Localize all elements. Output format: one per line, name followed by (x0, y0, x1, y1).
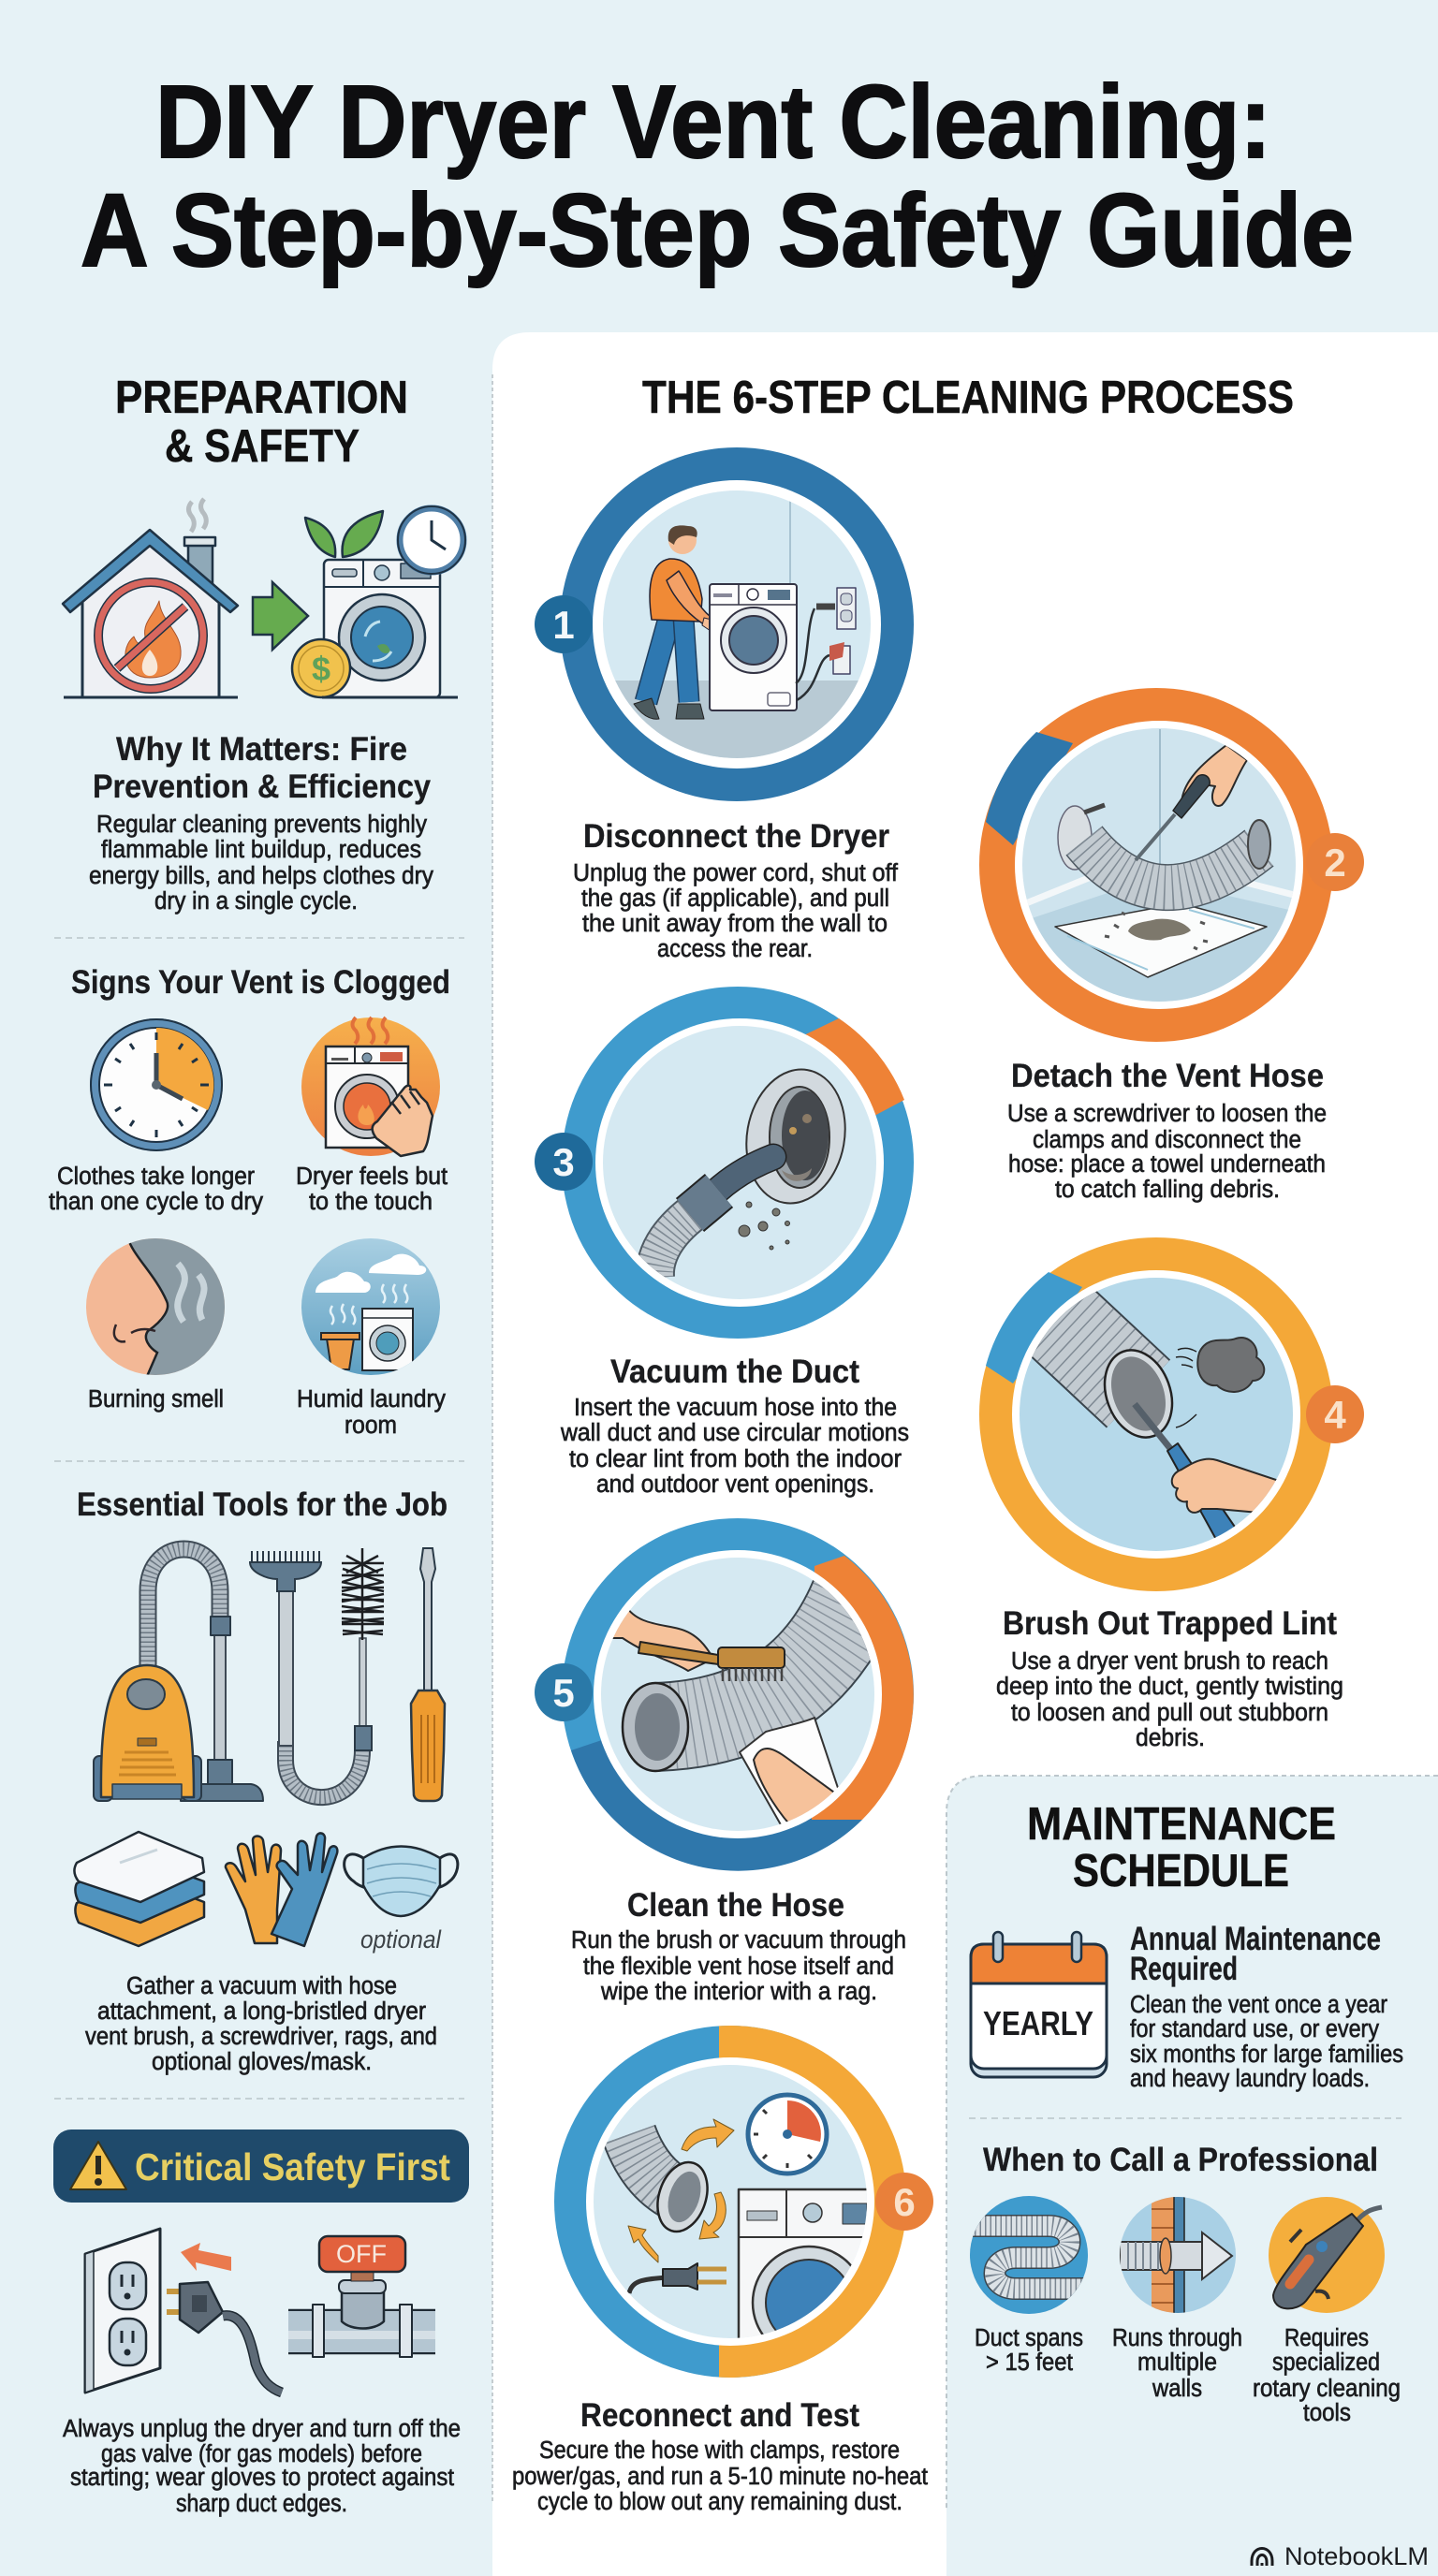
text: brush out trapped lint: debris. (1136, 1725, 1205, 1751)
title (81, 65, 1354, 288)
badge: step 3 (535, 1133, 593, 1191)
text: gather tools: vent brush, a screwdriver, rags, and (85, 2024, 437, 2050)
text: brush out trapped lint: deep into the duct, gently twisting (996, 1674, 1343, 1700)
panel: maintenance schedule (946, 1776, 1438, 2576)
icon: yearly calendar (971, 1932, 1107, 2077)
text: brush out trapped lint: Use a dryer vent brush to reach (1011, 1648, 1328, 1675)
badge: step 2 (1306, 833, 1364, 891)
text: brush out trapped lint: Brush Out Trapped Lint (1003, 1605, 1337, 1642)
text: disconnect the dryer: the unit away from the wall to (582, 911, 888, 937)
text block: why it matters: flammable lint buildup, reduces (101, 837, 421, 863)
icon: floor brush with flexible hose (250, 1551, 362, 1797)
section heading: preparation and safety: & SAFETY (165, 421, 360, 472)
text: brush out trapped lint: to loosen and pull out stubborn (1011, 1700, 1328, 1726)
text: clothes take longer (49, 1164, 263, 1215)
text: detach the vent hose: Detach the Vent Hose (1011, 1058, 1324, 1094)
step 2 illustration (979, 688, 1364, 1042)
text: disconnect the dryer: Unplug the power cord, shut off (573, 860, 899, 886)
text: gather tools: attachment, a long-bristled dryer (97, 1998, 426, 2025)
text: clean the hose: Clean the Hose (627, 1887, 844, 1924)
icon: gas valve off: OFF (336, 2240, 387, 2268)
text: clean the hose (571, 1887, 906, 2005)
icon: rotary cleaning tool (1269, 2197, 1385, 2313)
icon: wall outlet (85, 2229, 160, 2393)
icon: vacuum cleaner (94, 1549, 263, 1801)
heading: the six step cleaning process: THE 6-STEP CLEANING PROCESS (642, 373, 1294, 423)
text: burning smell: Burning smell (88, 1386, 224, 1412)
icon: efficient dryer with leaves, clock and coin (292, 506, 465, 697)
label: specialized tools: specialized (1272, 2349, 1380, 2376)
banner: critical safety first (53, 2130, 469, 2203)
text: reconnect and test: cycle to blow out any remaining dust. (537, 2489, 902, 2515)
text block: why it matters: Regular cleaning prevents highly (96, 812, 427, 838)
heading: signs your vent is clogged: Signs Your Vent is Clogged (71, 964, 450, 1001)
text: vacuum the duct: wall duct and use circular motions (560, 1420, 909, 1446)
icon: duct through walls (1120, 2197, 1236, 2313)
badge: step 2: 2 (1324, 841, 1346, 885)
icon: face mask (345, 1846, 458, 1916)
text: vacuum the duct: to clear lint from both the indoor (569, 1446, 902, 1472)
icon: warning triangle (70, 2142, 126, 2189)
icon: plug and cord (167, 2282, 282, 2393)
logo: notebooklm: NotebookLM (1284, 2542, 1429, 2570)
text: annual maintenance: Required (1130, 1951, 1238, 1987)
text: always unplug (63, 2416, 461, 2517)
label: duct spans: > 15 feet (986, 2349, 1073, 2376)
text: annual maintenance: and heavy laundry loads. (1130, 2066, 1370, 2092)
text: dryer feels hot: Dryer feels but (296, 1164, 448, 1190)
heading: when to call a professional: When to Call a Professional (983, 2142, 1378, 2178)
label: runs through walls (1112, 2325, 1242, 2402)
badge: step 5 (535, 1663, 593, 1721)
text: always unplug: sharp duct edges. (176, 2491, 347, 2517)
text: clean the hose: the flexible vent hose itself and (583, 1954, 894, 1980)
text: vacuum the duct: Vacuum the Duct (610, 1354, 859, 1390)
heading: essential tools: Essential Tools for the Job (77, 1486, 448, 1523)
title: DIY Dryer Vent Cleaning: (155, 65, 1271, 180)
label: specialized tools: rotary cleaning (1253, 2376, 1401, 2402)
heading: maintenance schedule: SCHEDULE (1073, 1846, 1289, 1896)
badge: step 6: 6 (893, 2180, 916, 2224)
title: A Step-by-Step Safety Guide (81, 173, 1354, 288)
text: gather tools: Gather a vacuum with hose (126, 1973, 397, 1999)
text: always unplug: Always unplug the dryer and turn off the (63, 2416, 461, 2442)
icon: house with no fire (63, 499, 238, 697)
text: annual maintenance (1130, 1921, 1403, 2092)
text: dryer feels hot (296, 1164, 448, 1215)
step 4 illustration (979, 1237, 1364, 1591)
step 6 illustration (554, 2026, 933, 2378)
badge: step 4: 4 (1324, 1393, 1346, 1437)
icon: nose and smoke (86, 1238, 225, 1375)
text: disconnect the dryer: access the rear. (657, 936, 813, 962)
text block: why it matters (89, 731, 433, 915)
label: specialized tools (1253, 2325, 1401, 2426)
badge: step 3: 3 (552, 1140, 575, 1184)
icon: screwdriver (411, 1548, 445, 1801)
panel: preparation and safety (49, 373, 469, 2517)
text block: why it matters: energy bills, and helps clothes dry (89, 863, 433, 889)
text: vacuum the duct: and outdoor vent openings. (596, 1471, 874, 1498)
text: detach the vent hose (1007, 1058, 1327, 1203)
text block: why it matters: Why It Matters: Fire (116, 731, 407, 768)
text: brush out trapped lint (996, 1605, 1343, 1751)
arrow: unplug direction (181, 2243, 231, 2271)
text: clothes take longer: Clothes take longer (57, 1164, 255, 1190)
heading: maintenance schedule: MAINTENANCE (1027, 1799, 1336, 1850)
icon: towels (74, 1832, 204, 1946)
text: detach the vent hose: hose: place a towel underneath (1008, 1151, 1326, 1178)
badge: step 1 (535, 595, 593, 653)
text: clean the hose: Run the brush or vacuum through (571, 1927, 906, 1954)
text: dryer feels hot: to the touch (309, 1189, 433, 1215)
badge: step 1: 1 (552, 603, 575, 647)
banner: critical safety first: Critical Safety First (135, 2145, 450, 2188)
text: vacuum the duct (560, 1354, 909, 1498)
text block: why it matters: Prevention & Efficiency (93, 768, 431, 805)
icon: gas valve off (288, 2236, 435, 2357)
text: disconnect the dryer: Disconnect the Dryer (583, 818, 889, 855)
label: duct spans: Duct spans (975, 2325, 1083, 2351)
text: reconnect and test: Reconnect and Test (580, 2397, 859, 2434)
text: annual maintenance: Clean the vent once a year (1130, 1992, 1387, 2018)
text: humid laundry room: Humid laundry (297, 1386, 446, 1412)
badge: step 5: 5 (552, 1671, 575, 1715)
label: specialized tools: Requires (1284, 2325, 1369, 2351)
text: reconnect and test: Secure the hose with clamps, restore (539, 2437, 900, 2464)
text: always unplug: starting; wear gloves to protect against (70, 2465, 454, 2491)
text: detach the vent hose: clamps and disconnect the (1033, 1127, 1301, 1153)
text: disconnect the dryer: the gas (if applicable), and pull (581, 886, 889, 912)
text: detach the vent hose: Use a screwdriver to loosen the (1007, 1101, 1327, 1127)
text: gather tools (85, 1973, 437, 2075)
icon: efficient dryer with leaves, clock and coin: $ (312, 650, 330, 688)
text: reconnect and test (512, 2397, 928, 2515)
badge: step 4 (1306, 1385, 1364, 1443)
text: humid laundry room: room (345, 1412, 397, 1439)
text: humid laundry room (297, 1386, 446, 1439)
section heading: preparation and safety: PREPARATION (115, 373, 408, 423)
step 5 illustration (535, 1518, 914, 1871)
heading: maintenance schedule (1027, 1799, 1336, 1896)
label: specialized tools: tools (1303, 2400, 1351, 2426)
text: clean the hose: wipe the interior with a rag. (600, 1979, 877, 2005)
text: annual maintenance: six months for large families (1130, 2042, 1403, 2068)
badge: step 6 (875, 2173, 933, 2231)
icon: yearly calendar: YEARLY (983, 2004, 1093, 2042)
text: annual maintenance: for standard use, or every (1130, 2016, 1379, 2042)
label: runs through walls: Runs through (1112, 2325, 1242, 2351)
step 1 illustration (535, 447, 914, 801)
icon: long duct (964, 2196, 1095, 2314)
icon: hot dryer (301, 1017, 440, 1156)
text: clothes take longer: than one cycle to dry (49, 1189, 263, 1215)
text: always unplug: gas valve (for gas models) before (101, 2441, 422, 2467)
icon: gloves (226, 1833, 337, 1946)
text: gather tools: optional gloves/mask. (152, 2049, 372, 2075)
label: runs through walls: multiple (1137, 2349, 1217, 2376)
label: runs through walls: walls (1152, 2376, 1202, 2402)
panel: six step cleaning process (492, 332, 1438, 2576)
text: detach the vent hose: to catch falling debris. (1055, 1177, 1280, 1203)
label: duct spans (975, 2325, 1083, 2376)
step 3 illustration (535, 987, 914, 1339)
icon: clock (91, 1019, 222, 1150)
text: disconnect the dryer (573, 818, 899, 962)
section heading: preparation and safety (115, 373, 408, 472)
icon: bristle vent brush (342, 1548, 384, 1750)
text: reconnect and test: power/gas, and run a 5-10 minute no-heat (512, 2464, 928, 2490)
arrow: green (253, 582, 308, 650)
text block: why it matters: dry in a single cycle. (154, 888, 358, 915)
icon: humid laundry room (301, 1238, 440, 1375)
label: optional: optional (360, 1925, 442, 1954)
text: vacuum the duct: Insert the vacuum hose into the (574, 1395, 897, 1421)
